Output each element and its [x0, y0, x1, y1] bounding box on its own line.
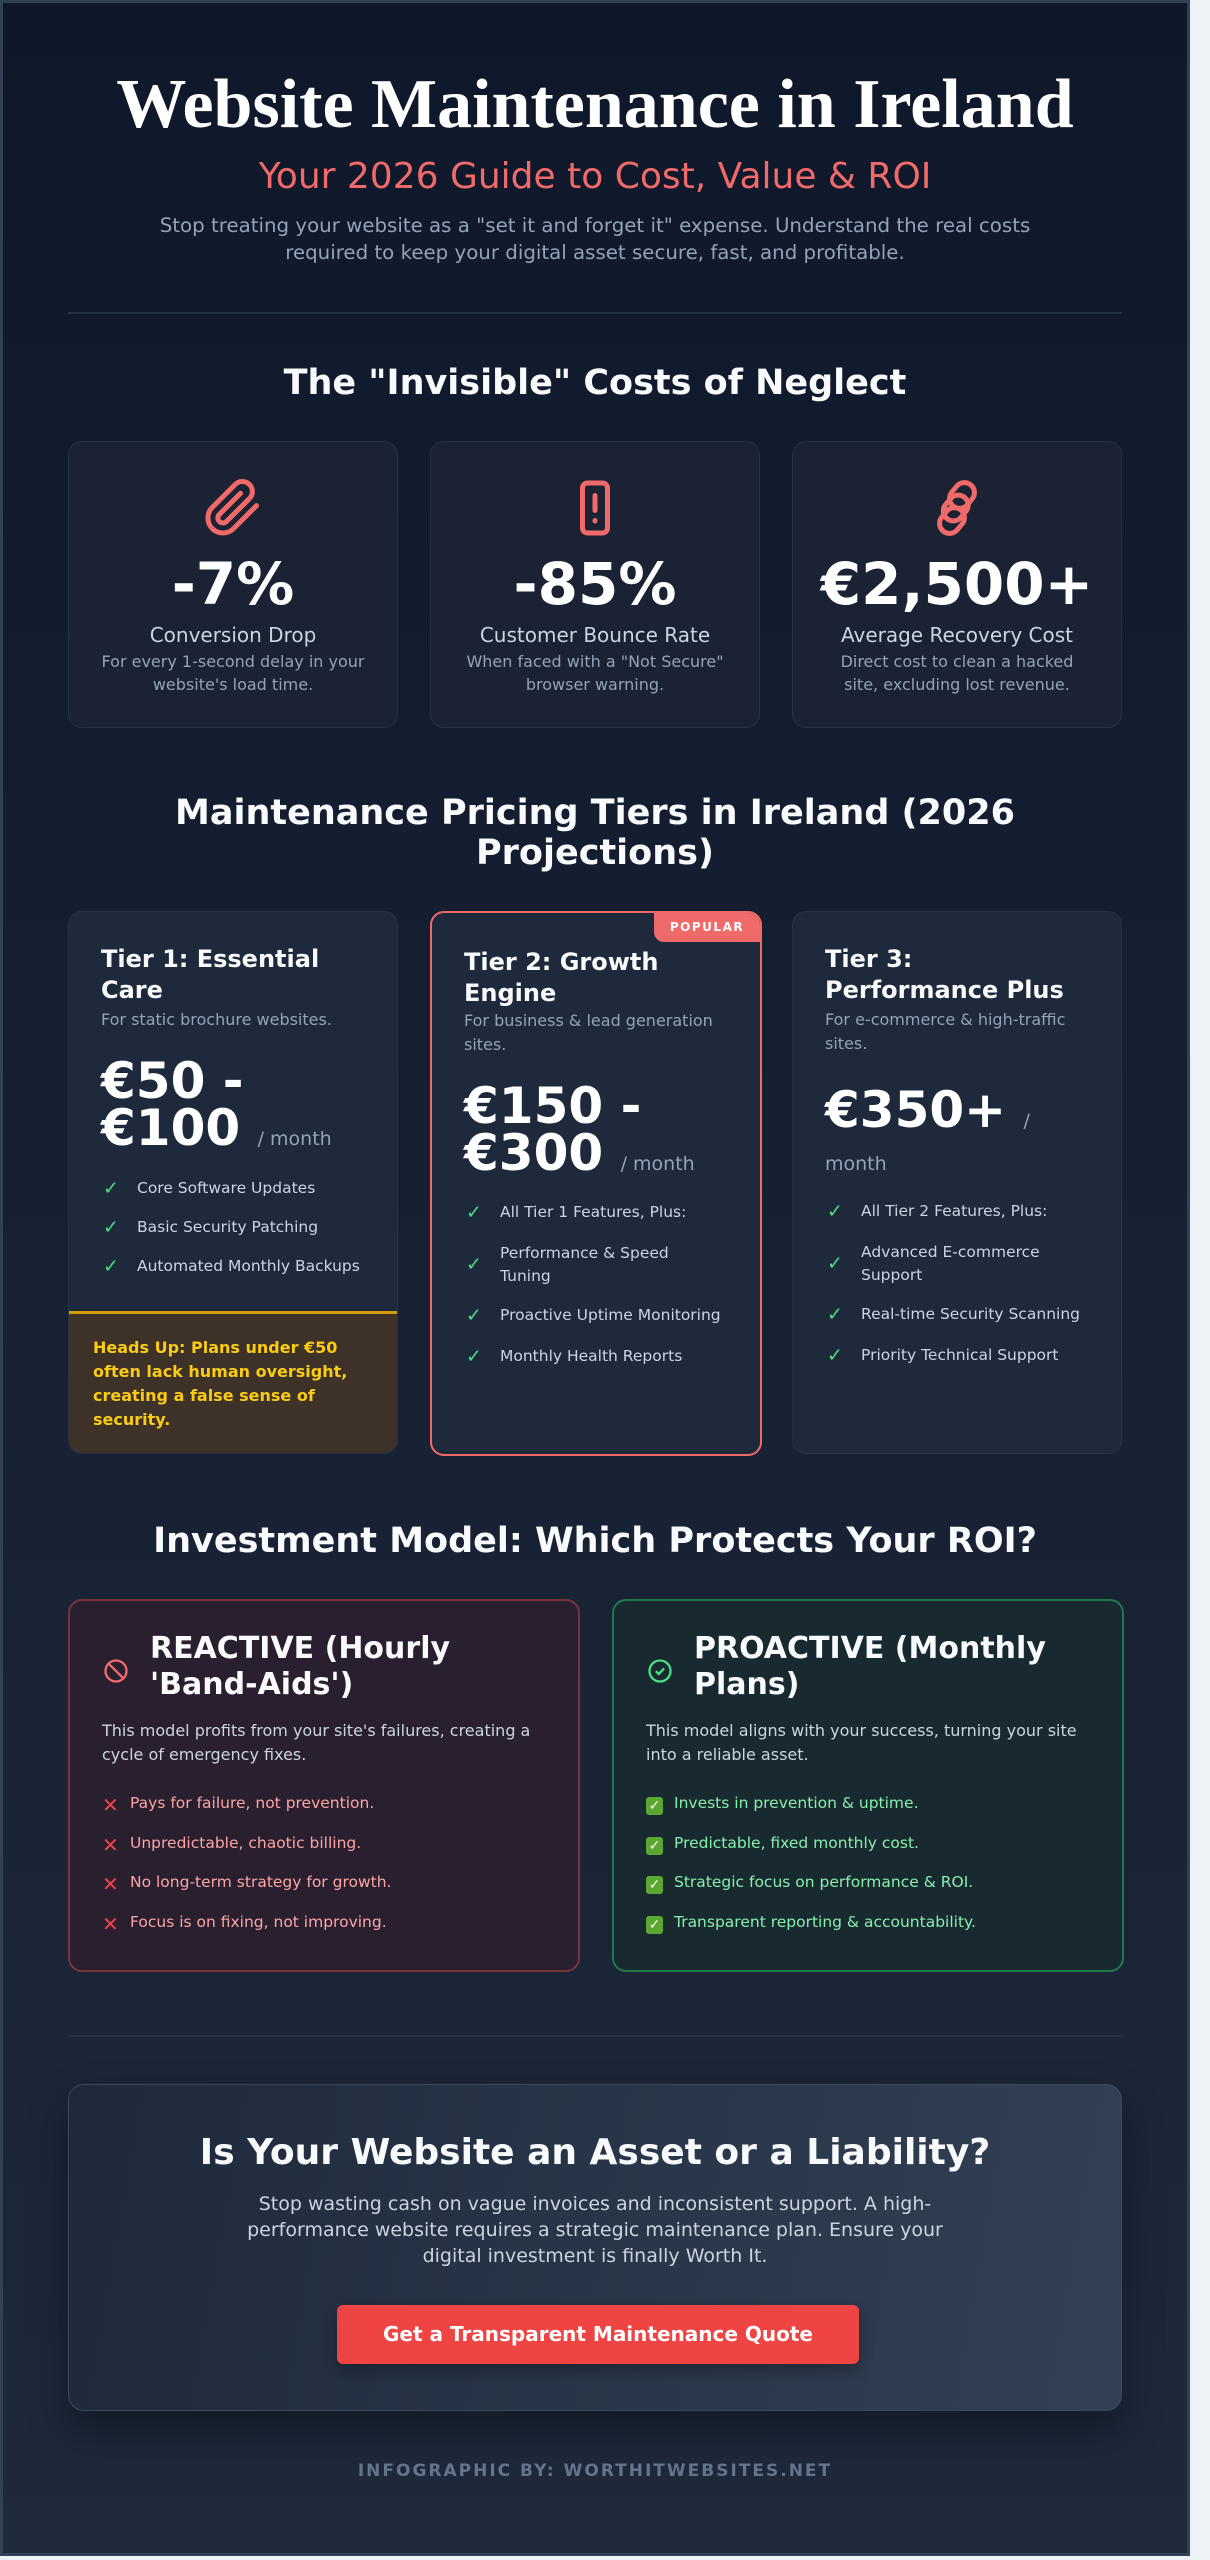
- intro text: Stop treating your website as a "set it and forget it" expense. Understand the real costs required to keep your digital asset secure, fast, and profitable.: [160, 214, 1030, 264]
- panel: reactive: This model profits from your site's failures, creating a cycle of emergency fixes.: [102, 1721, 530, 1764]
- features: Automated Monthly Backups: [137, 1257, 360, 1275]
- tier 3 card: [792, 911, 1122, 1454]
- list: proactive benefits: Strategic focus on performance & ROI.: [674, 1873, 973, 1891]
- button: Get a Transparent Maintenance Quote: [383, 2322, 813, 2346]
- features: [468, 1203, 721, 1365]
- list: reactive drawbacks: ✕: [102, 1833, 119, 1857]
- stat card: conversion drop: Conversion Drop: [150, 623, 316, 647]
- features: [106, 1179, 360, 1275]
- list: reactive drawbacks: Focus is on fixing, not improving.: [130, 1913, 387, 1931]
- features: Support: [861, 1266, 922, 1284]
- tier 3 card: Tier 3:: [825, 945, 912, 973]
- list: reactive drawbacks: Unpredictable, chaotic billing.: [130, 1834, 361, 1852]
- tier 3 card: month: [825, 1153, 887, 1175]
- panel: call to action: [68, 2084, 1122, 2411]
- tier 2 card: [430, 911, 762, 1456]
- features: Real-time Security Scanning: [861, 1305, 1080, 1323]
- tier 3 card: For e-commerce & high-traffic sites.: [825, 1010, 1065, 1053]
- features: [830, 1202, 1080, 1364]
- button: [337, 2305, 859, 2364]
- list: reactive drawbacks: ✕: [102, 1912, 119, 1936]
- cta text: Stop wasting cash on vague invoices and inconsistent support. A high-performance website requires a strategic maintenance plan. Ensure your digital investment is finally Worth It.: [247, 2193, 943, 2267]
- list: proactive benefits: [646, 1794, 976, 1934]
- price: [463, 1077, 695, 1182]
- price: €300 / month: [464, 1124, 695, 1182]
- list: reactive drawbacks: [102, 1793, 391, 1936]
- tier 1 card: For static brochure websites.: [101, 1010, 332, 1029]
- icon: alert device: [580, 480, 610, 536]
- panel: reactive: REACTIVE (Hourly 'Band-Aids'): [150, 1631, 450, 1702]
- features: Tuning: [500, 1267, 551, 1285]
- stat card: conversion drop: [68, 441, 398, 728]
- features: Core Software Updates: [137, 1179, 315, 1197]
- heading: pricing tiers: Maintenance Pricing Tiers in Ireland (2026 Projections): [175, 793, 1015, 873]
- price: €150 -: [464, 1077, 641, 1135]
- heading: investment model: Investment Model: Which Protects Your ROI?: [153, 1521, 1037, 1561]
- features: Proactive Uptime Monitoring: [500, 1306, 721, 1324]
- price: [100, 1052, 332, 1157]
- list: proactive benefits: Transparent reporting & accountability.: [674, 1913, 976, 1931]
- list: reactive drawbacks: ✕: [102, 1872, 119, 1896]
- warning callout: [69, 1311, 397, 1453]
- badge: popular: [654, 913, 760, 942]
- features: Basic Security Patching: [137, 1218, 318, 1236]
- stat card: recovery cost: €2,500+: [821, 550, 1093, 618]
- price: €50 -: [101, 1052, 244, 1110]
- list: reactive drawbacks: Pays for failure, not prevention.: [130, 1794, 374, 1812]
- panel: proactive: [612, 1599, 1124, 1972]
- stat card: recovery cost: site, excluding lost revenue.: [844, 675, 1070, 694]
- stat card: bounce rate: Customer Bounce Rate: [480, 623, 710, 647]
- badge: popular: POPULAR: [670, 920, 744, 934]
- stat card: conversion drop: -7%: [172, 550, 294, 618]
- tier 1 card: [68, 911, 398, 1454]
- panel: proactive: This model aligns with your success, turning your site into a reliable asset.: [646, 1721, 1077, 1764]
- stat card: bounce rate: When faced with a "Not Secure" browser warning.: [466, 652, 724, 694]
- features: All Tier 2 Features, Plus:: [861, 1202, 1047, 1220]
- icon: check circle: [648, 1659, 672, 1683]
- list: proactive benefits: Invests in prevention & uptime.: [674, 1794, 918, 1812]
- features: Priority Technical Support: [861, 1346, 1058, 1364]
- stat card: bounce rate: -85%: [514, 550, 676, 618]
- list: reactive drawbacks: No long-term strategy for growth.: [130, 1873, 391, 1891]
- tier 1 card: Tier 1: Essential Care: [101, 945, 319, 1004]
- title: Website Maintenance in Ireland: [116, 66, 1074, 143]
- stat card: bounce rate: [430, 441, 760, 728]
- stat card: conversion drop: For every 1-second delay in your website's load time.: [102, 652, 364, 694]
- list: proactive benefits: ✓: [649, 1917, 660, 1933]
- tier 3 card: Performance Plus: [825, 976, 1064, 1004]
- features: All Tier 1 Features, Plus:: [500, 1203, 686, 1221]
- panel: proactive: PROACTIVE (Monthly Plans): [694, 1631, 1046, 1702]
- stat card: recovery cost: Average Recovery Cost: [841, 623, 1073, 647]
- stat card: recovery cost: [792, 441, 1122, 728]
- list: proactive benefits: Predictable, fixed monthly cost.: [674, 1834, 919, 1852]
- features: Monthly Health Reports: [500, 1347, 682, 1365]
- list: proactive benefits: ✓: [649, 1798, 660, 1814]
- heading: invisible costs: The "Invisible" Costs of Neglect: [284, 363, 906, 403]
- features: Performance & Speed: [500, 1244, 669, 1262]
- list: proactive benefits: ✓: [649, 1877, 660, 1893]
- list: proactive benefits: ✓: [649, 1838, 660, 1854]
- footer credit: INFOGRAPHIC BY: WORTHITWEBSITES.NET: [358, 2461, 832, 2481]
- icon: chain links: [937, 480, 977, 536]
- icon: paperclip: [205, 479, 259, 536]
- icon: prohibited: [104, 1659, 128, 1683]
- warning callout: Heads Up: Plans under €50 often lack human oversight, creating a false sense of security.: [93, 1338, 347, 1429]
- subtitle: Your 2026 Guide to Cost, Value & ROI: [259, 156, 931, 197]
- features: Advanced E-commerce: [861, 1243, 1040, 1261]
- list: reactive drawbacks: ✕: [102, 1793, 119, 1817]
- tier 2 card: For business & lead generation sites.: [464, 1011, 713, 1054]
- stat card: recovery cost: Direct cost to clean a hacked: [841, 652, 1073, 671]
- panel: reactive: [68, 1599, 580, 1972]
- price: €100 / month: [101, 1099, 332, 1157]
- cta heading: Is Your Website an Asset or a Liability?: [200, 2132, 990, 2173]
- tier 2 card: Tier 2: Growth Engine: [464, 948, 658, 1007]
- price: €350+ /: [825, 1081, 1030, 1139]
